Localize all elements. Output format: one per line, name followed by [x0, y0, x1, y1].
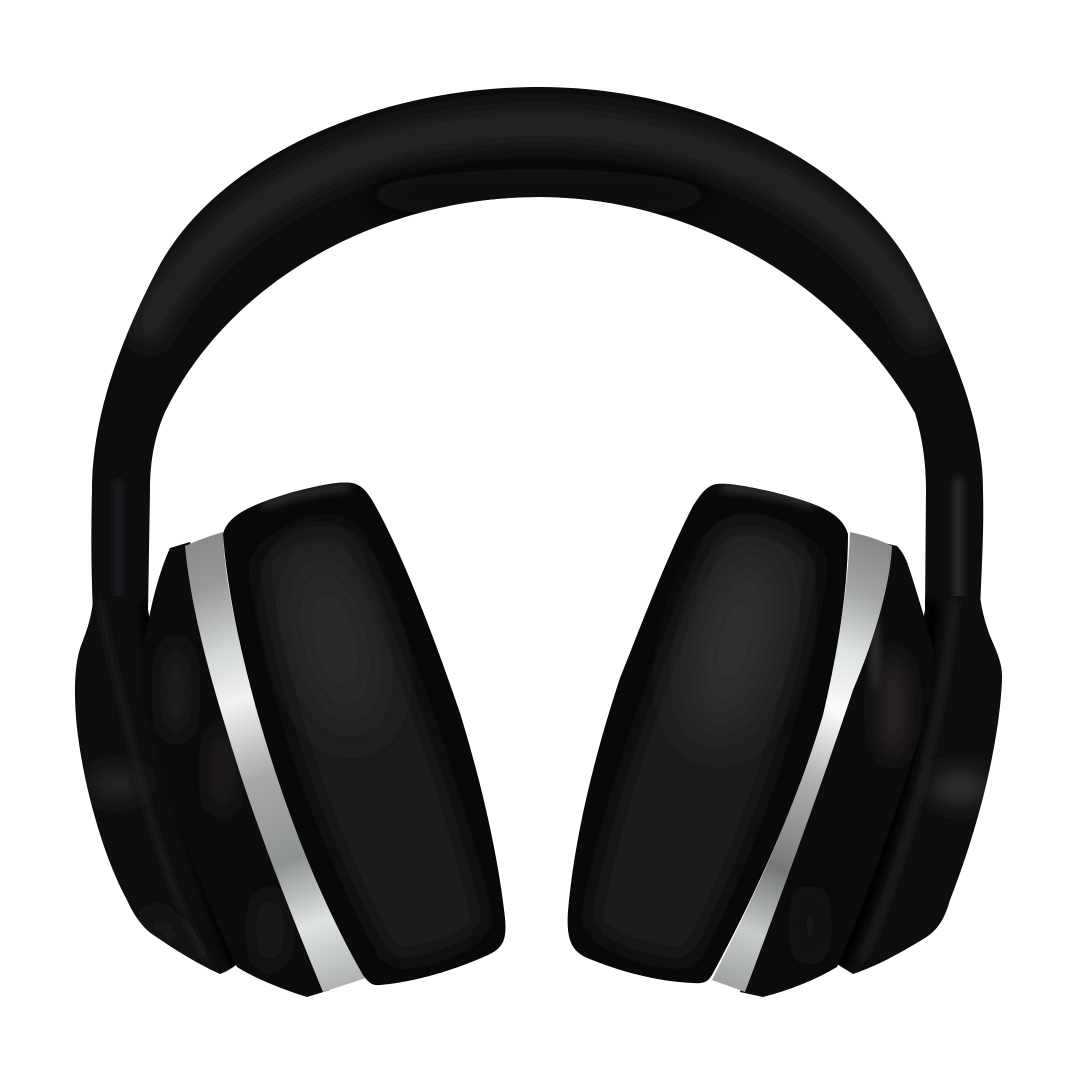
right ear cup — [560, 475, 1015, 1010]
headband — [80, 80, 1000, 620]
outer shell: right — [838, 596, 1002, 974]
silver ring: right — [712, 532, 892, 992]
left slider highlight — [115, 480, 122, 610]
silver ring: left — [185, 532, 366, 992]
mid housing: left — [145, 542, 330, 997]
left ear cup — [60, 475, 515, 1010]
mid housing: right — [740, 540, 940, 1010]
cushion: right — [568, 484, 848, 984]
cushion: left — [215, 475, 515, 995]
illustration: over-ear headphones — [74, 87, 1002, 997]
outer shell: left — [74, 596, 236, 974]
right slider highlight — [955, 478, 962, 608]
